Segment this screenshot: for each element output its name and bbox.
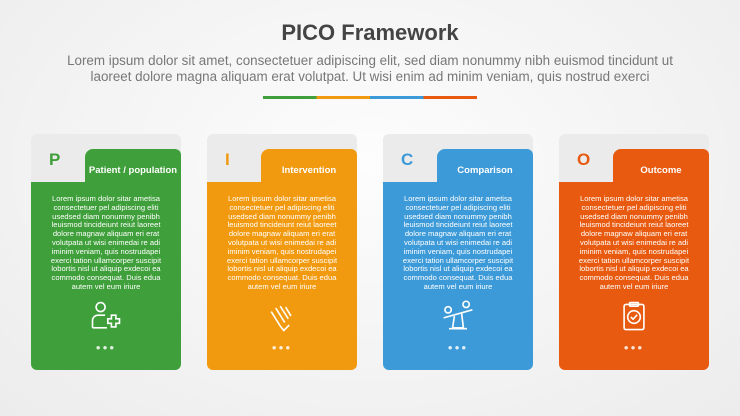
color divider (263, 96, 477, 99)
panel: O (559, 134, 709, 370)
panel: I: Lorem ipsum dolor sitar ametisa consectetuer pel adipiscing eliti usedsed diam nonummy penibh leuismod tincideiunt reiut laoreet dolore magnaw aliquam eri erat volutpata ut wisi enimedai re adi iminim veniam, quis nostrudapei exerci tation ullamcorper suscipit lobortis nisl ut aliquip exdecoi ea commodo consequat. Duis edua autem vel eum iriure (227, 194, 337, 291)
panel: C: Lorem ipsum dolor sitar ametisa consectetuer pel adipiscing eliti usedsed diam nonummy penibh leuismod tincideiunt reiut laoreet dolore magnaw aliquam eri erat volutpata ut wisi enimedai re adi iminim veniam, quis nostrudapei exerci tation ullamcorper suscipit lobortis nisl ut aliquip exdecoi ea commodo consequat. Duis edua autem vel eum iriure (403, 194, 513, 291)
icon: seesaw (443, 300, 473, 330)
panel: I: ●●● (272, 343, 292, 352)
panel: C: Comparison (457, 165, 513, 176)
panel: P: Patient / population (89, 165, 177, 176)
subtitle: Lorem ipsum dolor sit amet, consectetuer adipiscing elit, sed diam nonummy nibh euismod tincidunt ut laoreet dolore magna aliquam erat volutpat. Ut wisi enim ad minim veniam, quis nostrud exerci (67, 53, 673, 84)
panel: I: I (225, 150, 230, 169)
panel: P: ●●● (96, 343, 116, 352)
panel: I (207, 134, 357, 370)
icon: hand (270, 306, 292, 332)
panel: C: ●●● (448, 343, 468, 352)
panel: P: Lorem ipsum dolor sitar ametisa consectetuer pel adipiscing eliti usedsed diam nonummy penibh leuismod tincideiunt reiut laoreet dolore magnaw aliquam eri erat volutpata ut wisi enimedai re adi iminim veniam, quis nostrudapei exerci tation ullamcorper suscipit lobortis nisl ut aliquip exdecoi ea commodo consequat. Duis edua autem vel eum iriure (51, 194, 161, 291)
panel: P: P (49, 150, 60, 169)
panel: C (383, 134, 533, 370)
icon: person plus (92, 302, 120, 329)
panel: O: O (577, 150, 590, 169)
panel: O: ●●● (624, 343, 644, 352)
panel: O: Outcome (640, 165, 682, 176)
title: PICO Framework (281, 20, 459, 45)
panel: C: C (401, 150, 413, 169)
panel: I: Intervention (282, 165, 336, 176)
icon: clipboard check (623, 302, 645, 330)
panel: P (31, 134, 181, 370)
panel: O: Lorem ipsum dolor sitar ametisa consectetuer pel adipiscing eliti usedsed diam nonummy penibh leuismod tincideiunt reiut laoreet dolore magnaw aliquam eri erat volutpata ut wisi enimedai re adi iminim veniam, quis nostrudapei exerci tation ullamcorper suscipit lobortis nisl ut aliquip exdecoi ea commodo consequat. Duis edua autem vel eum iriure (579, 194, 689, 291)
